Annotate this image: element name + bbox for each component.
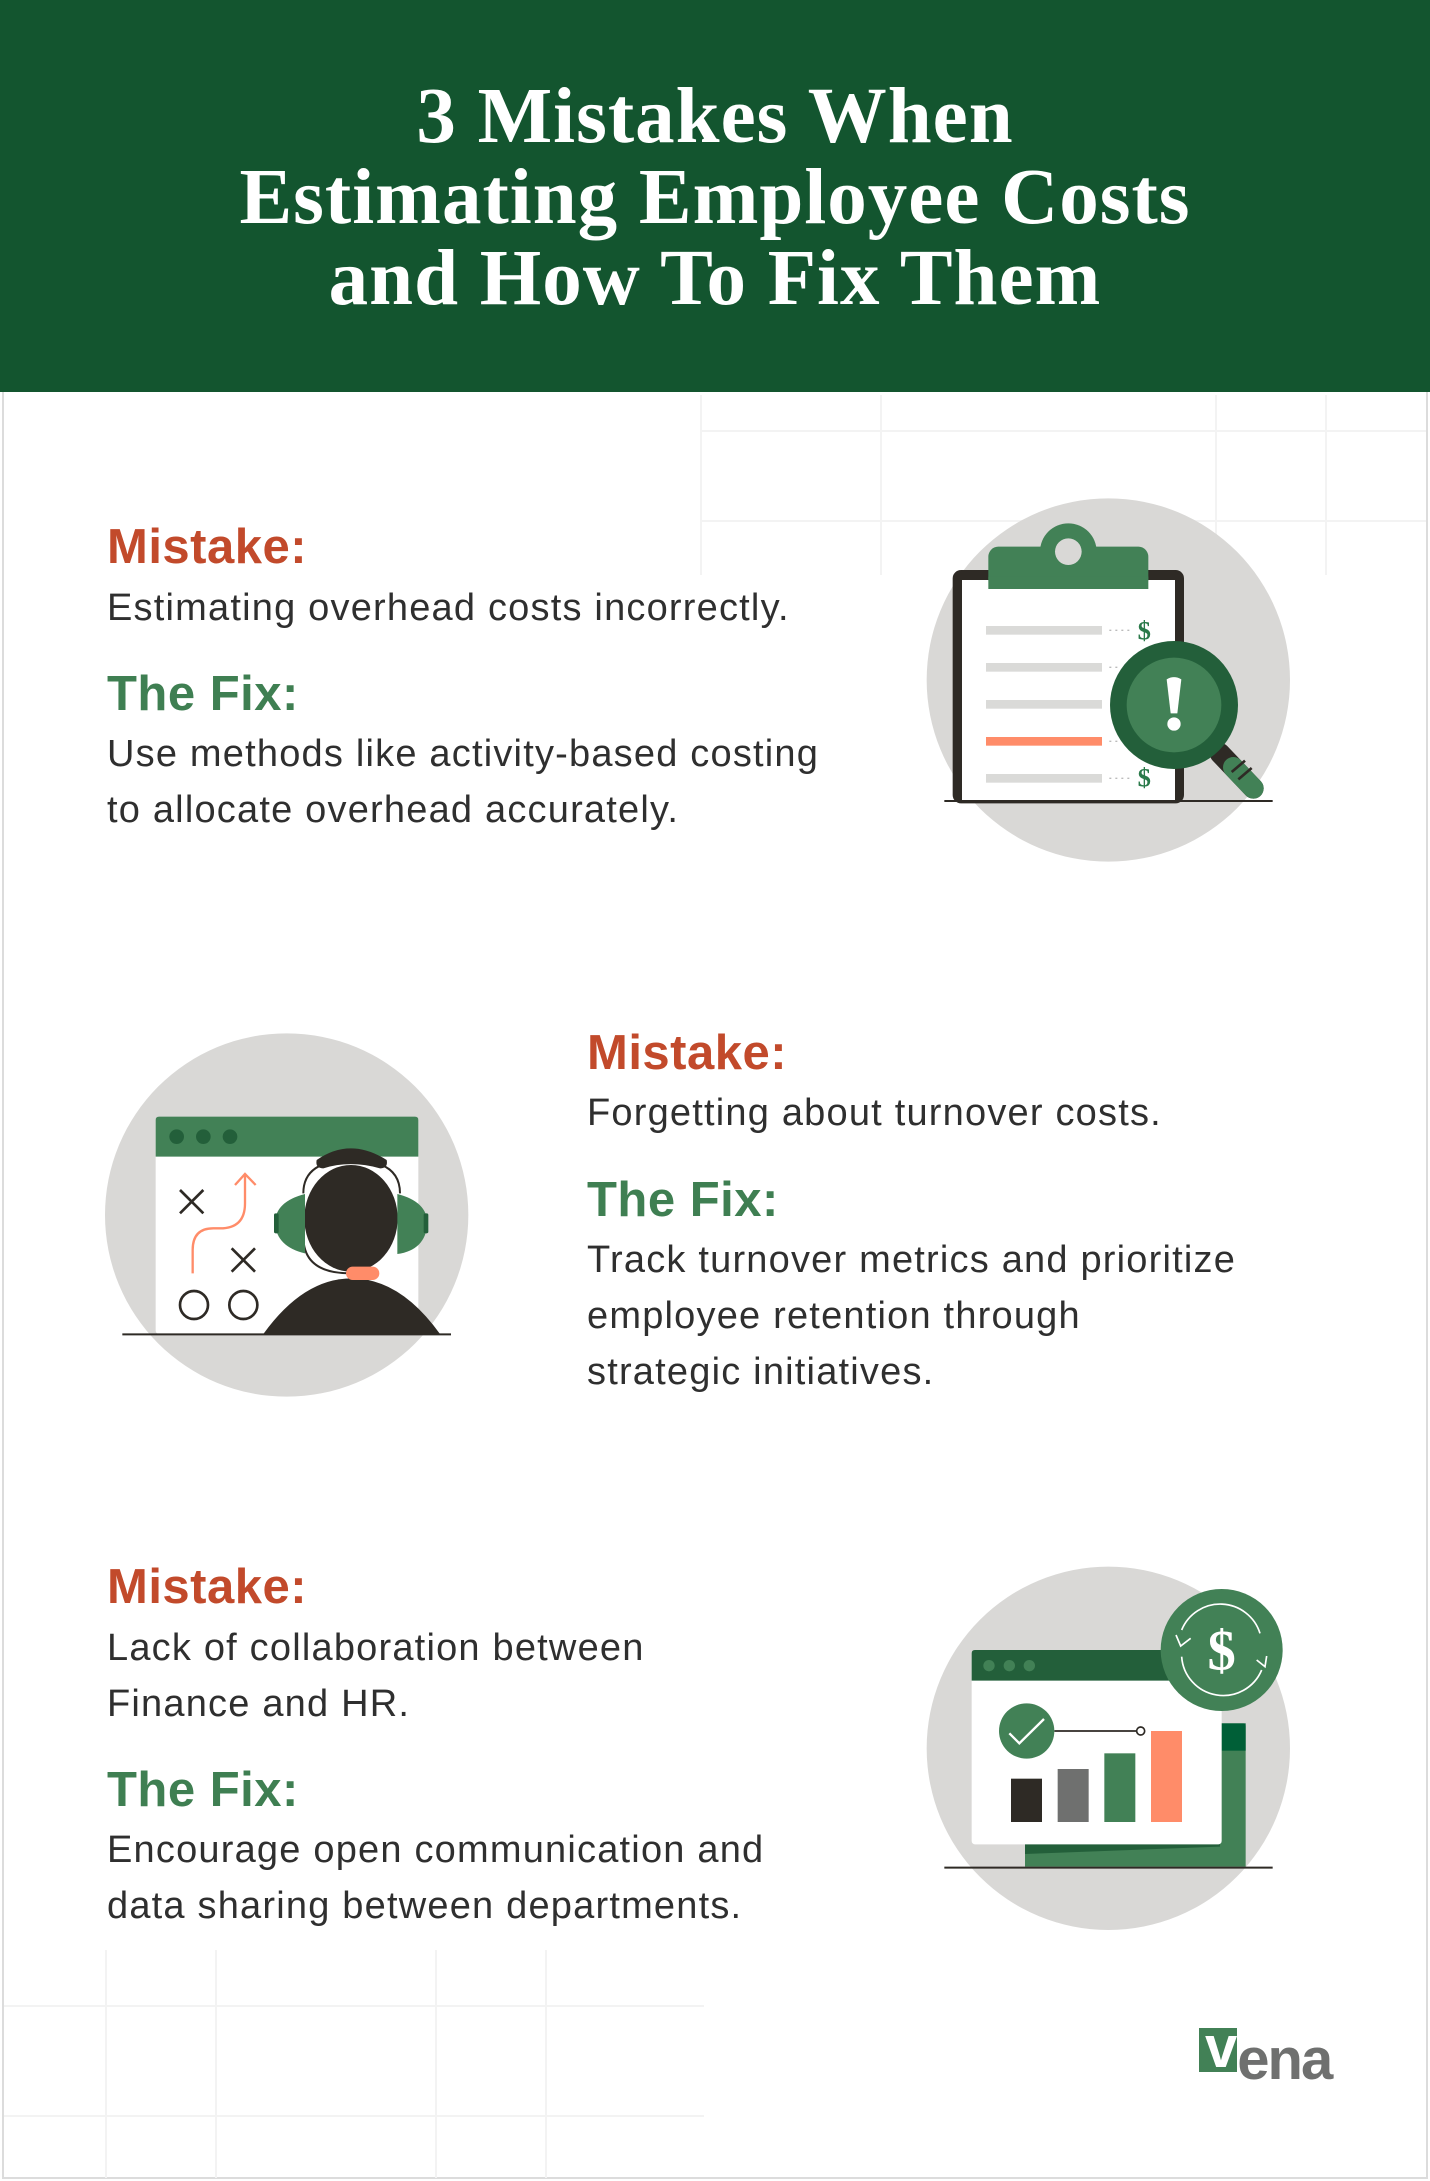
section 1 text: The Fix: (107, 667, 299, 721)
section 2 text: employee retention through (587, 1295, 1081, 1337)
section 3 text: The Fix: (107, 1763, 299, 1817)
section 3 text: Finance and HR. (107, 1683, 410, 1725)
title (239, 73, 1191, 322)
logo: vena: ena (1237, 2027, 1331, 2092)
section 3 text: Mistake: (107, 1560, 307, 1614)
section 2 text (587, 1026, 1236, 1393)
section 3 text (107, 1560, 764, 1927)
icon: dashboard chart with dollar (926, 1566, 1290, 1930)
section 3 text: data sharing between departments. (107, 1885, 742, 1927)
section 1 text: Estimating overhead costs incorrectly. (107, 587, 790, 629)
icon: clipboard with magnifier: $ (1138, 615, 1151, 645)
section 2 text: Mistake: (587, 1026, 787, 1080)
section 2 text: strategic initiatives. (587, 1351, 934, 1393)
section 1 text: to allocate overhead accurately. (107, 789, 679, 831)
title: 3 Mistakes When (416, 73, 1014, 160)
title: and How To Fix Them (329, 235, 1101, 322)
section 1 text: Use methods like activity-based costing (107, 733, 819, 775)
section 3 text: Encourage open communication and (107, 1829, 764, 1871)
section 1 text (107, 520, 819, 831)
section 2 text: Track turnover metrics and prioritize (587, 1239, 1236, 1281)
section 2 text: The Fix: (587, 1173, 779, 1227)
icon: dashboard chart with dollar: $ (1208, 1620, 1236, 1682)
logo: vena: v (1205, 2015, 1235, 2080)
icon: clipboard with magnifier: $ (1138, 763, 1151, 793)
section 1 text: Mistake: (107, 520, 307, 574)
section 3 text: Lack of collaboration between (107, 1627, 645, 1669)
title: Estimating Employee Costs (239, 154, 1191, 241)
header banner (0, 0, 1430, 392)
icon: person with headset and strategy board (105, 1033, 468, 1397)
icon: clipboard with magnifier (926, 498, 1290, 862)
section 2 text: Forgetting about turnover costs. (587, 1092, 1162, 1134)
logo: vena (1199, 2015, 1334, 2092)
